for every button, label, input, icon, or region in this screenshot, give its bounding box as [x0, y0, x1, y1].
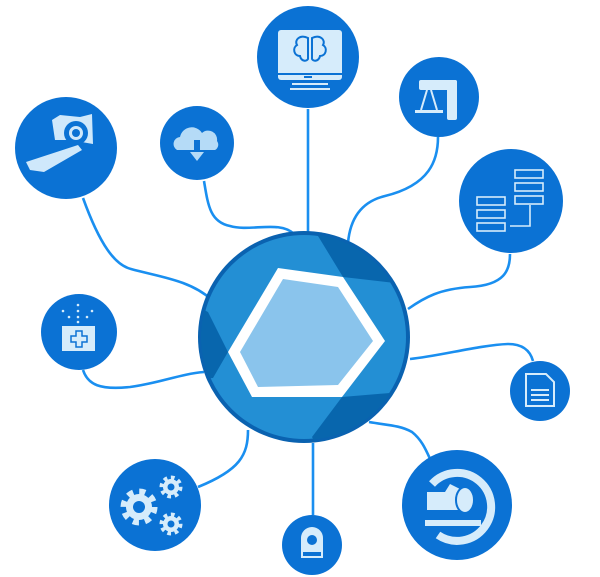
icon: document — [510, 361, 570, 421]
icon: x-ray machine — [399, 57, 479, 137]
icon: gears — [109, 459, 201, 551]
icon: first aid kit — [41, 294, 117, 370]
icon: brain monitor — [257, 6, 359, 108]
icon: cloud download — [160, 106, 234, 180]
icon: server network — [459, 149, 563, 253]
icon: CT scanner — [15, 97, 117, 199]
icon: small scanner — [282, 515, 342, 575]
connector lines — [83, 109, 533, 515]
central hub logo — [198, 231, 410, 443]
icon: MRI scanner — [402, 450, 512, 560]
